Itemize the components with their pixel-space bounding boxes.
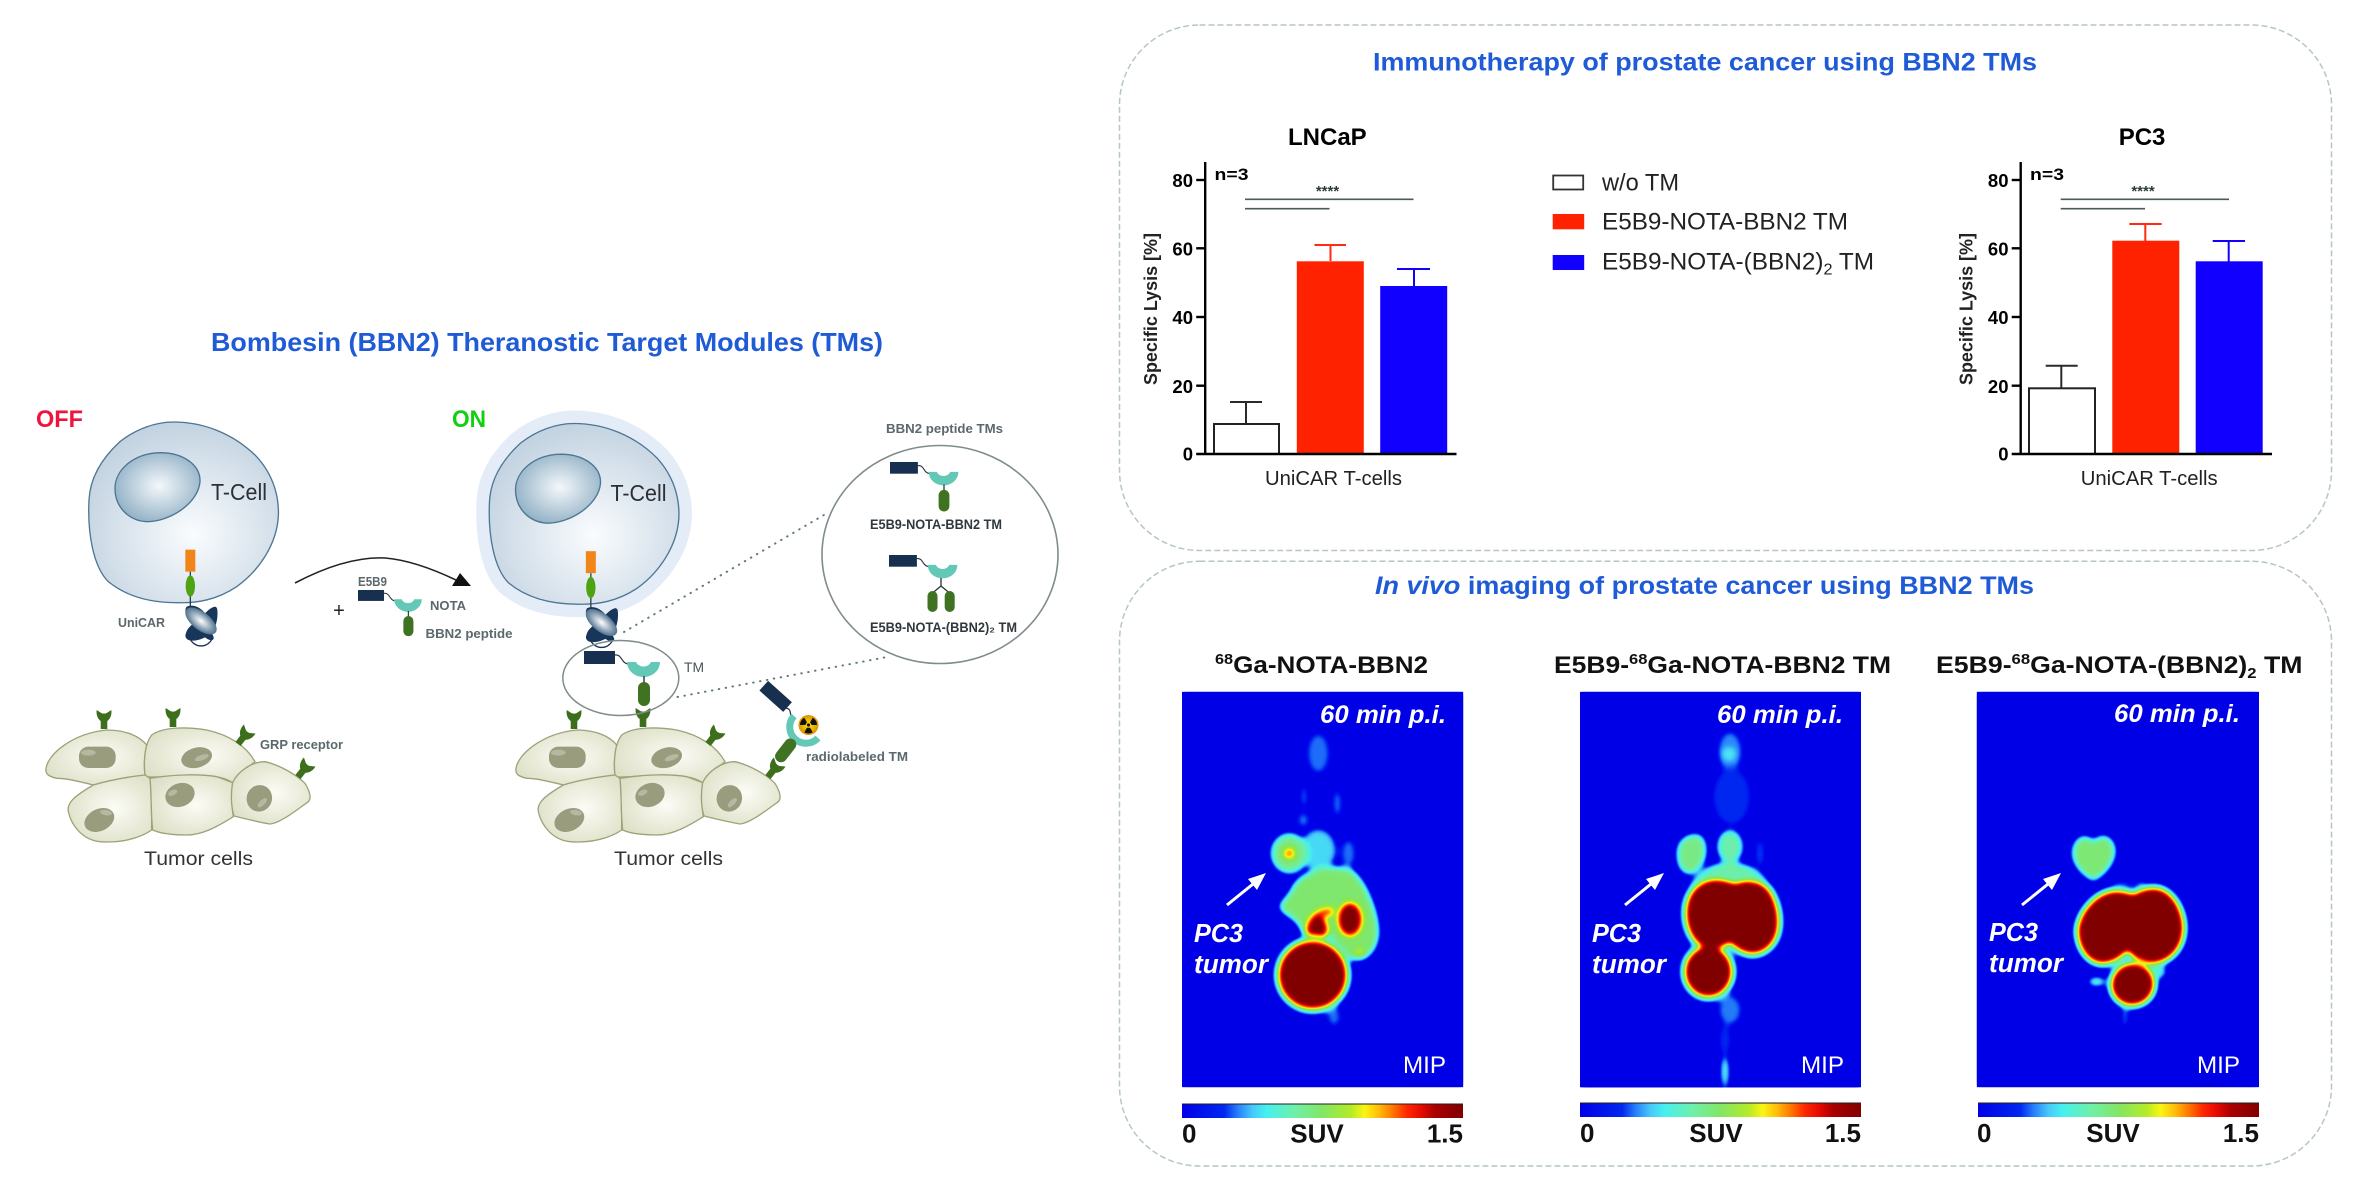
radiolabeled TM	[759, 681, 908, 765]
inset: BBN2 peptide TMs	[822, 421, 1058, 664]
PET image 1: 68Ga-NOTA-BBN2: tumor	[1194, 951, 1270, 979]
T-cell with UniCAR (off): T-Cell	[211, 479, 267, 505]
colour scale	[1182, 1104, 1463, 1148]
bar chart: LNCaP: 80	[1172, 170, 1193, 191]
bar chart: LNCaP: LNCaP	[1288, 124, 1367, 151]
bar chart: LNCaP: Specific Lysis [%]	[1140, 233, 1161, 385]
label: ON: ON	[452, 406, 486, 433]
legend: TM	[1833, 248, 1874, 275]
bar chart: PC3: 60	[1988, 238, 2008, 260]
error bars	[1230, 245, 1430, 424]
panel: immunotherapy	[1120, 25, 2332, 550]
PET image 3: E5B9-68Ga-NOTA-(BBN2)2 TM: MIP	[2197, 1052, 2240, 1079]
PET image 2: E5B9-68Ga-NOTA-BBN2 TM: 60 min p.i.	[1717, 701, 1843, 729]
bar chart: PC3: 40	[1988, 307, 2008, 328]
error bars	[2046, 224, 2245, 388]
panel heading: In vivo imaging of prostate cancer using BBN2 TMs	[1375, 572, 2034, 600]
PET image 1: 68Ga-NOTA-BBN2	[1182, 651, 1463, 1148]
target module added: +	[333, 600, 345, 622]
tumor cells with GRP receptors (on)	[516, 708, 786, 842]
significance	[2061, 199, 2229, 209]
bar chart: LNCaP: 0	[1183, 444, 1193, 465]
target module added	[333, 574, 512, 641]
PET image 2: E5B9-68Ga-NOTA-BBN2 TM: Ga-NOTA-BBN2 TM	[1647, 652, 1891, 679]
PET image 3: E5B9-68Ga-NOTA-(BBN2)2 TM: 2	[2247, 665, 2257, 682]
bound TM in circle	[563, 640, 704, 716]
legend: E5B9-NOTA-(BBN2)	[1602, 248, 1820, 275]
bar chart: LNCaP: 20	[1172, 376, 1193, 397]
panel: in vivo imaging	[1120, 561, 2332, 1166]
label: OFF: OFF	[36, 406, 83, 433]
arrow: tumor pointer	[2022, 873, 2061, 905]
PET image 1: 68Ga-NOTA-BBN2: 68	[1215, 651, 1233, 668]
PET image 3: E5B9-68Ga-NOTA-(BBN2)2 TM: tumor	[1989, 950, 2065, 978]
PET image 3: E5B9-68Ga-NOTA-(BBN2)2 TM: PC3	[1989, 919, 2038, 947]
bar chart: PC3: ****	[2131, 183, 2155, 200]
colour scale: 0	[1977, 1118, 1991, 1148]
bar chart: LNCaP: UniCAR T-cells	[1265, 468, 1402, 490]
bar chart: PC3: 0	[1998, 444, 2008, 465]
tumor cells with GRP receptors (off)	[46, 708, 316, 842]
bar chart: LNCaP: 40	[1172, 307, 1193, 328]
PET image 2: E5B9-68Ga-NOTA-BBN2 TM: PC3	[1592, 920, 1641, 948]
bar chart: PC3: UniCAR T-cells	[2081, 468, 2218, 490]
colour scale: SUV	[2086, 1118, 2140, 1148]
bar chart: PC3: 80	[1988, 170, 2008, 191]
PET image 1: 68Ga-NOTA-BBN2: Ga-NOTA-BBN2	[1233, 652, 1428, 679]
PET image 2: E5B9-68Ga-NOTA-BBN2 TM: E5B9-	[1554, 652, 1622, 679]
label: tumor cells: Tumor cells	[144, 849, 253, 870]
dimeric TM icon	[889, 555, 957, 612]
target module added: BBN2 peptide	[426, 626, 512, 641]
legend: E5B9-NOTA-BBN2 TM	[1602, 208, 1848, 235]
bound TM in circle: TM	[684, 659, 704, 675]
panel heading: Immunotherapy of prostate cancer using BBN2 TMs	[1373, 48, 2037, 76]
PET image 3: E5B9-68Ga-NOTA-(BBN2)2 TM: 68	[2012, 651, 2030, 668]
colour scale: 0	[1182, 1118, 1196, 1148]
colour scale: SUV	[1689, 1118, 1743, 1148]
bar chart: PC3: PC3	[2119, 124, 2165, 151]
panel: ON state schematic	[452, 406, 908, 870]
heading: BBN2 theranostic target modules: Bombesin (BBN2) Theranostic Target Modules (TMs)	[211, 327, 883, 357]
colour scale: 1.5	[2223, 1118, 2259, 1148]
bar chart: LNCaP: ****	[1316, 183, 1339, 200]
inset: BBN2 peptide TMs: E5B9-NOTA-(BBN2)₂ TM	[870, 619, 1017, 635]
bar chart: PC3	[1956, 124, 2272, 490]
target module added: E5B9	[358, 574, 387, 589]
PET image 1: 68Ga-NOTA-BBN2: MIP	[1403, 1052, 1446, 1079]
PET image 3: E5B9-68Ga-NOTA-(BBN2)2 TM: 60 min p.i.	[2114, 700, 2240, 728]
significance	[1245, 199, 1414, 209]
panel: OFF state schematic	[36, 406, 343, 870]
PET image 3: E5B9-68Ga-NOTA-(BBN2)2 TM	[1936, 651, 2302, 1148]
bar chart: PC3: n=3	[2030, 166, 2064, 184]
bars	[1214, 424, 1279, 454]
T-cell with UniCAR (off)	[89, 422, 278, 646]
PET image 3: E5B9-68Ga-NOTA-(BBN2)2 TM: Ga-NOTA-(BBN2)	[2030, 652, 2247, 679]
bar chart: LNCaP	[1140, 124, 1456, 490]
colour scale: 1.5	[1427, 1118, 1463, 1148]
bar chart: LNCaP: n=3	[1214, 166, 1248, 184]
PET image 2: E5B9-68Ga-NOTA-BBN2 TM: tumor	[1592, 951, 1668, 979]
inset: BBN2 peptide TMs: BBN2 peptide TMs	[886, 421, 1003, 436]
arrow: tumor pointer	[1227, 873, 1266, 905]
PET image 2: E5B9-68Ga-NOTA-BBN2 TM	[1554, 651, 1891, 1148]
legend: 2	[1823, 261, 1833, 278]
PET image 2: E5B9-68Ga-NOTA-BBN2 TM: 68	[1629, 651, 1647, 668]
PET image 1: 68Ga-NOTA-BBN2: 60 min p.i.	[1320, 701, 1446, 729]
colour scale: 0	[1580, 1118, 1594, 1148]
PET image 3: E5B9-68Ga-NOTA-(BBN2)2 TM: TM	[2257, 652, 2302, 679]
bar chart: PC3: 20	[1988, 376, 2008, 397]
arrow: tumor pointer	[1625, 873, 1664, 905]
bar chart: LNCaP: 60	[1172, 238, 1193, 260]
colour scale: 1.5	[1825, 1118, 1861, 1148]
activated T-cell with halo	[489, 423, 679, 647]
arrow: activation by TM	[295, 558, 471, 586]
colour scale	[1580, 1103, 1861, 1148]
PET image 1: 68Ga-NOTA-BBN2: PC3	[1194, 920, 1243, 948]
activated T-cell with halo: T-Cell	[610, 480, 666, 506]
PET image 2: E5B9-68Ga-NOTA-BBN2 TM: MIP	[1801, 1052, 1844, 1079]
label: GRP receptor: GRP receptor	[260, 737, 343, 752]
target module added: NOTA	[430, 598, 467, 613]
radiolabeled TM: radiolabeled TM	[806, 749, 908, 764]
label: tumor cells: Tumor cells	[614, 849, 723, 870]
bar chart: PC3: Specific Lysis [%]	[1956, 233, 1977, 385]
label: UniCAR: UniCAR	[118, 615, 166, 630]
legend: w/o TM	[1601, 170, 1679, 197]
legend	[1553, 170, 1874, 278]
PET image 3: E5B9-68Ga-NOTA-(BBN2)2 TM: E5B9-	[1936, 652, 2004, 679]
colour scale: SUV	[1290, 1118, 1344, 1148]
monomeric TM icon	[890, 462, 958, 512]
dotted zoom lines	[624, 512, 887, 697]
bars	[2029, 388, 2095, 454]
inset: BBN2 peptide TMs: E5B9-NOTA-BBN2 TM	[870, 516, 1002, 532]
colour scale	[1977, 1103, 2259, 1148]
